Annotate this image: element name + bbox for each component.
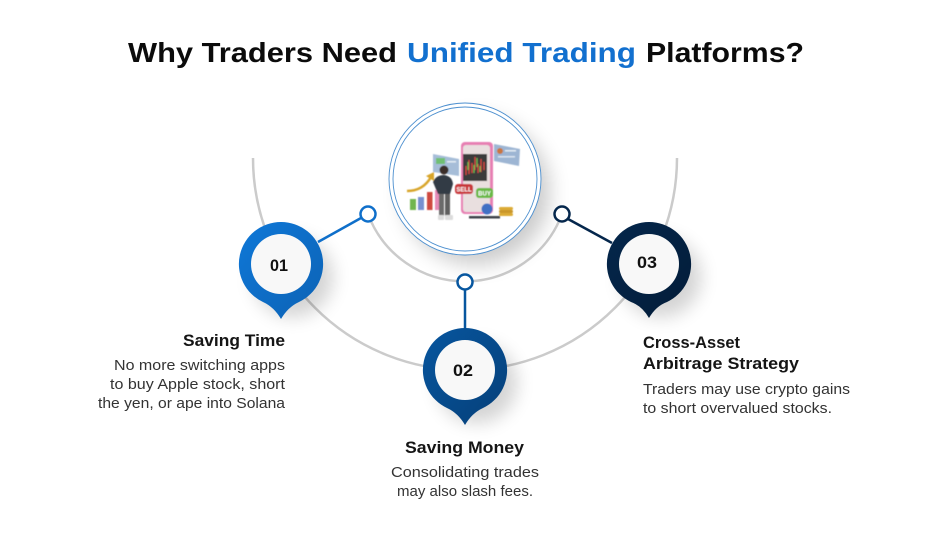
connector 02 (464, 290, 466, 329)
pin 02 (423, 274, 517, 425)
outer arc (253, 158, 677, 370)
number 02: 02 (453, 361, 473, 380)
number 03 (619, 234, 679, 294)
buy button: BUY (478, 192, 491, 198)
title (128, 37, 804, 68)
text block: saving money: Consolidating trades (391, 465, 539, 481)
text block: cross-asset arbitrage: Cross-Asset (643, 333, 740, 352)
marker 01 (239, 222, 323, 319)
text block: saving time (98, 331, 286, 412)
gear (482, 204, 492, 214)
number 01: 01 (270, 256, 288, 275)
marker 02 (423, 328, 507, 425)
text block: cross-asset arbitrage: Traders may use crypto gains (643, 382, 850, 398)
connector 01 (318, 218, 361, 242)
title: Why Traders Need (128, 37, 397, 68)
growth arrow (407, 172, 434, 191)
text block: saving time: to buy Apple stock, short (110, 377, 285, 393)
number 02 (435, 340, 495, 400)
text block: cross-asset arbitrage (643, 333, 850, 417)
connector 03 (568, 219, 612, 243)
text block: saving money (391, 438, 539, 500)
left info card (433, 154, 459, 176)
trader figure (433, 166, 453, 220)
illustration: trader with phone (407, 142, 520, 220)
tablet (469, 216, 500, 218)
text block: saving money: Saving Money (405, 438, 525, 457)
title: Platforms? (646, 37, 804, 68)
text block: saving money: may also slash fees. (397, 484, 533, 500)
inner arc (368, 214, 562, 281)
phone (461, 142, 493, 214)
title: Unified Trading (407, 37, 636, 68)
marker 03 (607, 222, 691, 318)
node 01 (360, 206, 376, 222)
central illustration circle (389, 103, 550, 265)
node 03 (554, 206, 570, 222)
node 02 (458, 274, 472, 290)
number 03: 03 (637, 253, 657, 272)
bar chart (410, 190, 439, 210)
text block: cross-asset arbitrage: Arbitrage Strategy (643, 354, 800, 373)
text block: saving time: Saving Time (183, 331, 285, 350)
pin 01 (239, 206, 376, 319)
pin 03 (554, 206, 701, 318)
text block: cross-asset arbitrage: to short overvalued stocks. (643, 401, 832, 417)
text block: saving time: the yen, or ape into Solana (98, 396, 286, 412)
right info card (494, 144, 520, 166)
sell button: SELL (456, 188, 472, 194)
coins (499, 207, 513, 216)
text block: saving time: No more switching apps (114, 358, 285, 374)
